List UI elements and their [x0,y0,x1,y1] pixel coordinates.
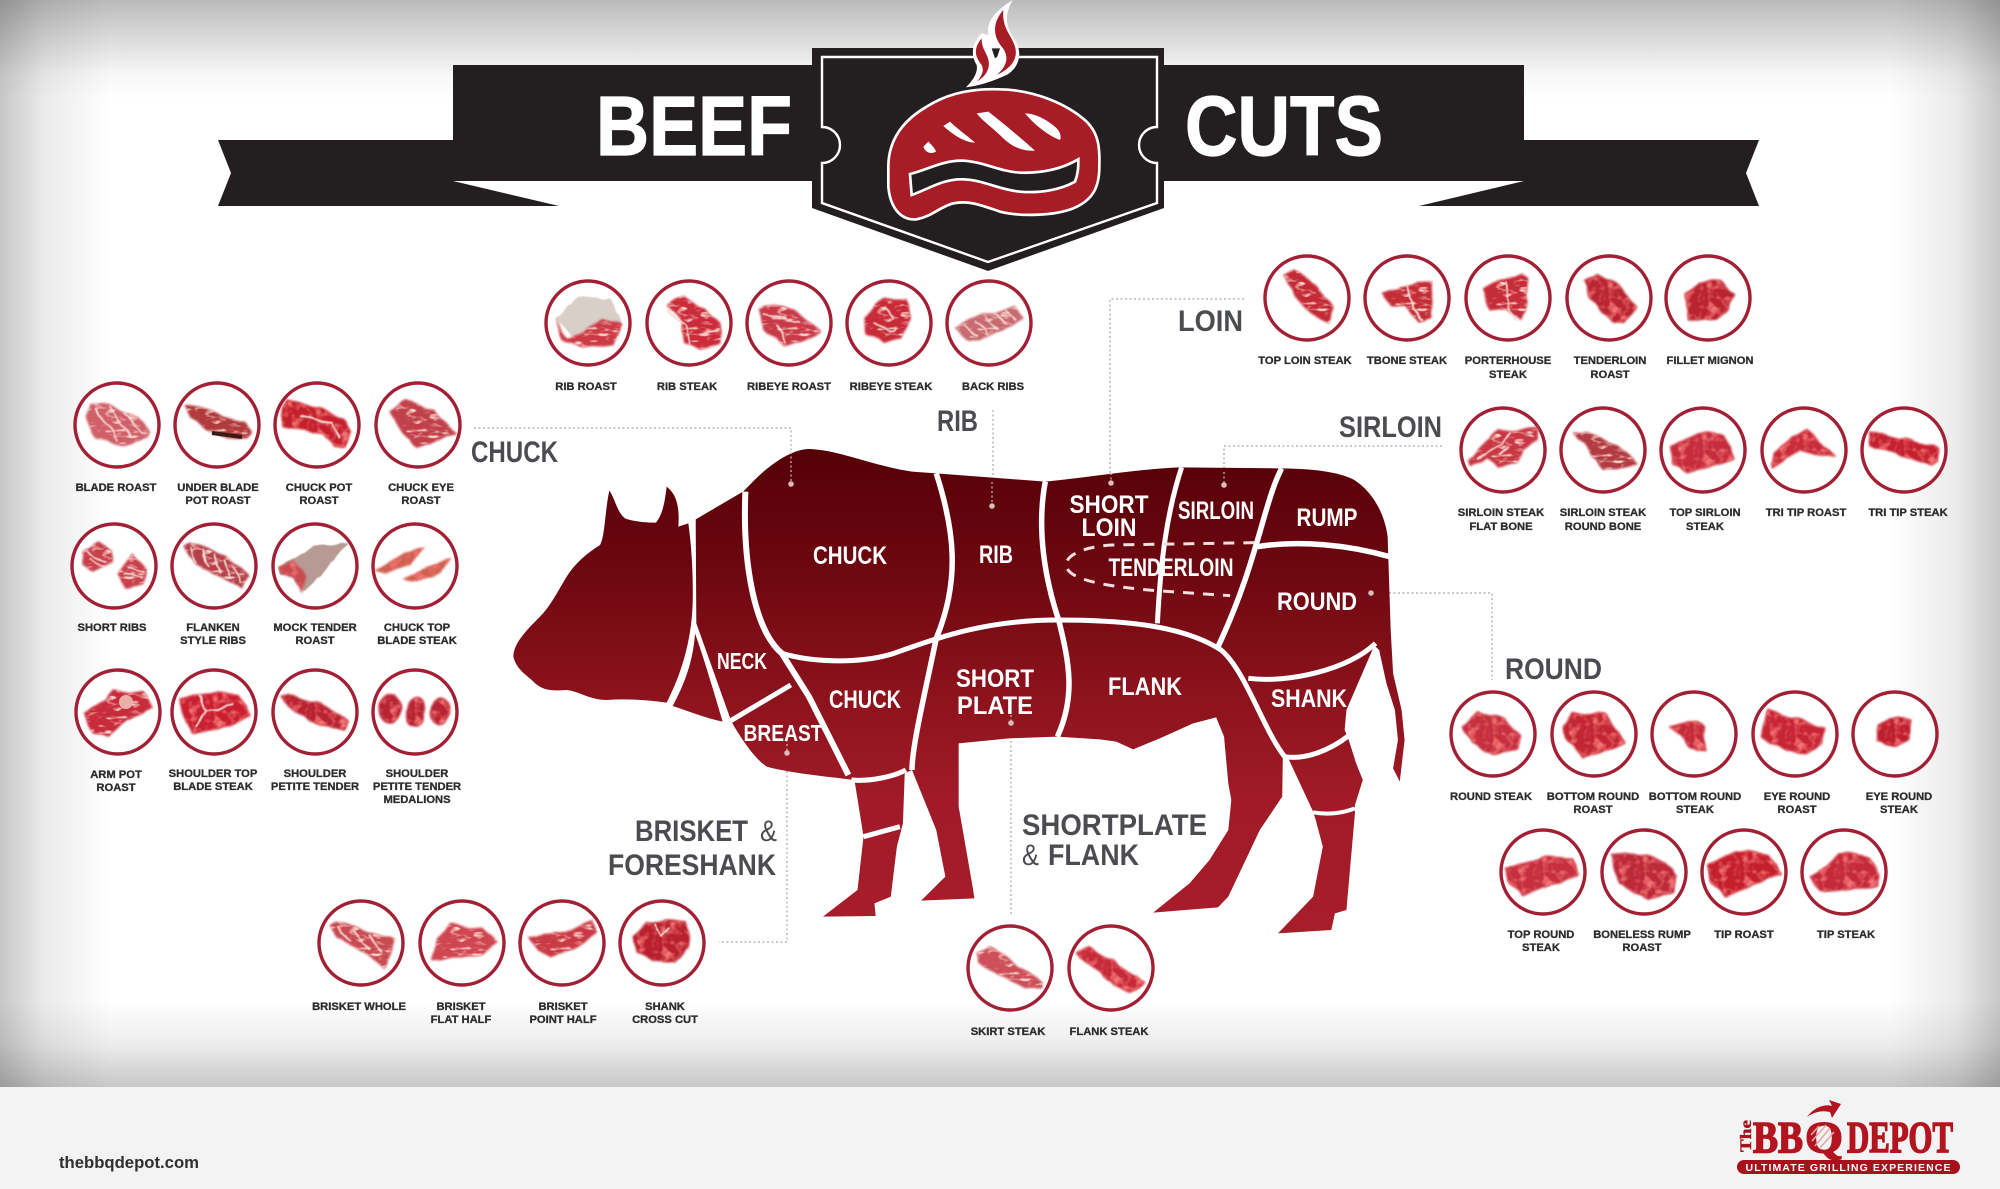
cow cut labels: PLATE [957,692,1033,720]
cut: boneless rump roast [1593,830,1691,954]
cut: brisket flat half [420,901,504,1026]
cut: arm pot roast: ARM POT [90,769,142,781]
panel: loin cuts [1258,256,1754,381]
cut: sirloin steak flat bone: FLAT BONE [1469,521,1533,533]
cut: chuck pot roast: ROAST [299,495,339,507]
cut: sirloin steak round bone: SIRLOIN STEAK [1560,507,1646,519]
icon: steak with smoke [888,0,1099,219]
cut: bottom round roast: BOTTOM ROUND [1547,791,1639,803]
cut: shoulder petite tender medalions: PETITE TENDER [373,781,461,793]
cow cut labels: SHORT [956,665,1034,693]
cut: tenderloin roast: TENDERLOIN [1574,355,1646,367]
title word cuts: CUTS [1185,79,1383,173]
cow cut labels: SIRLOIN [1178,497,1254,525]
cut: eye round roast: EYE ROUND [1764,791,1830,803]
cut: boneless rump roast: BONELESS RUMP [1593,929,1691,941]
logo wordmark: BB [1753,1113,1803,1162]
cut: shank cross cut [620,901,704,1026]
cut: short ribs [72,524,156,634]
cow cut labels: RIB [979,541,1013,569]
cut: tbone steak: TBONE STEAK [1367,355,1447,367]
cut: tip roast: TIP ROAST [1714,929,1774,941]
heading: shortplate and flank: FLANK [1048,839,1139,872]
cut: tenderloin roast: ROAST [1590,369,1630,381]
cut: tbone steak [1365,256,1449,367]
cut: ribeye steak [847,281,932,393]
leader lines [474,299,1492,942]
cut: bottom round steak [1649,692,1741,816]
cut: chuck top blade steak: CHUCK TOP [384,622,451,634]
cut: tri tip steak: TRI TIP STEAK [1868,507,1948,519]
cut: eye round steak: EYE ROUND [1866,791,1932,803]
cow cut labels: TENDERLOIN [1108,554,1234,582]
cut dividers [729,467,1389,837]
heading: brisket and foreshank: FORESHANK [608,849,776,882]
title word beef: BEEF [596,79,792,173]
cut: shoulder petite tender: PETITE TENDER [271,781,359,793]
cut: tip steak [1802,830,1886,941]
heading: chuck: CHUCK [471,436,558,469]
heading: sirloin: SIRLOIN [1339,411,1442,444]
cut: tenderloin roast [1567,256,1651,381]
cut: blade roast [75,383,159,494]
cut: brisket whole [312,901,406,1013]
cut: bottom round roast: ROAST [1573,804,1613,816]
cut: sirloin steak flat bone [1458,408,1545,533]
cut: eye round roast [1753,692,1837,816]
panel: short plate and flank cuts [968,926,1153,1038]
logo wordmark: DEPOT [1847,1113,1953,1162]
heading: rib: RIB [937,405,978,438]
logo tagline pill: ULTIMATE GRILLING EXPERIENCE [1746,1162,1950,1174]
cut: shoulder petite tender [271,670,359,793]
heading: brisket and foreshank: & [760,815,777,848]
heading: shortplate and flank [1022,809,1207,872]
cow cut labels: SHORT [1070,491,1148,519]
logo wordmark [1753,1113,1953,1162]
cut: rib roast: RIB ROAST [555,381,617,393]
cut: mock tender roast [273,524,357,647]
cut: top sirloin steak: TOP SIRLOIN [1669,507,1741,519]
panel: chuck cuts [72,383,461,806]
cow cut labels [717,491,1358,746]
cut: top sirloin steak [1661,408,1745,533]
logo flame [1807,1100,1841,1118]
cut: fillet mignon: FILLET MIGNON [1666,355,1754,367]
cut: flanken style ribs: FLANKEN [186,622,240,634]
heading: loin: LOIN [1178,305,1243,338]
cut: fillet mignon [1666,256,1754,367]
cut: porterhouse steak: STEAK [1489,369,1527,381]
cut: sirloin steak round bone: ROUND BONE [1565,521,1642,533]
cut: chuck pot roast [275,383,359,507]
cut: blade roast: BLADE ROAST [76,482,157,494]
cut: porterhouse steak: PORTERHOUSE [1465,355,1552,367]
cut: brisket point half: POINT HALF [529,1014,597,1026]
cut: shoulder top blade steak: BLADE STEAK [173,781,253,793]
cut: round steak: ROUND STEAK [1450,791,1532,803]
cut: shank cross cut: SHANK [645,1001,685,1013]
cut: chuck top blade steak [373,524,457,647]
logo wordmark: Q [1805,1113,1843,1162]
cut: under blade pot roast: POT ROAST [185,495,251,507]
cut: bottom round steak: STEAK [1676,804,1714,816]
cut: back ribs: BACK RIBS [962,381,1025,393]
cow cut labels: FLANK [1108,673,1182,701]
cut: ribeye steak: RIBEYE STEAK [850,381,932,393]
cut: shank cross cut: CROSS CUT [632,1014,698,1026]
cut: mock tender roast: MOCK TENDER [273,622,357,634]
cut: chuck eye roast [376,383,460,507]
cow cut labels: BREAST [744,720,822,746]
cow cut labels: NECK [717,648,767,674]
cut: brisket whole: BRISKET WHOLE [312,1001,406,1013]
cut: arm pot roast [76,670,160,794]
cut: brisket point half: BRISKET [538,1001,588,1013]
cut: shoulder top blade steak [169,670,258,793]
heading: shortplate and flank: & [1022,839,1039,872]
cut: shoulder top blade steak: SHOULDER TOP [169,768,258,780]
cut: shoulder petite tender medalions: SHOULDER [386,768,448,780]
cut: short ribs: SHORT RIBS [78,622,147,634]
logo grill mark [1811,1125,1834,1148]
cut: chuck pot roast: CHUCK POT [286,482,352,494]
panel: sirloin cuts [1458,408,1948,533]
heading: round: ROUND [1505,653,1602,686]
cut: eye round roast: ROAST [1777,804,1817,816]
cut: skirt steak: SKIRT STEAK [971,1026,1045,1038]
cut: flank steak [1069,926,1153,1038]
cut: back ribs [947,281,1031,393]
leader dots on cow [784,452,1374,756]
cut: round steak [1450,692,1535,803]
cut: top loin steak [1258,256,1352,367]
cut: top loin steak: TOP LOIN STEAK [1258,355,1352,367]
panel: round cuts [1450,692,1937,954]
cut: tri tip roast: TRI TIP ROAST [1766,507,1846,519]
cut: top round steak: STEAK [1522,942,1560,954]
cut: eye round steak [1853,692,1937,816]
cut: ribeye roast: RIBEYE ROAST [747,381,831,393]
panel: brisket and foreshank cuts [312,901,704,1026]
cow cut labels: CHUCK [813,542,887,570]
cut: brisket flat half: BRISKET [436,1001,486,1013]
heading: shortplate and flank: SHORTPLATE [1022,809,1207,842]
cow cut labels: CHUCK [829,686,901,714]
cut: chuck eye roast: CHUCK EYE [388,482,454,494]
cut: bottom round roast [1547,692,1639,816]
cut: top round steak: TOP ROUND [1508,929,1574,941]
cut: skirt steak [968,926,1052,1038]
cut: flank steak: FLANK STEAK [1070,1026,1148,1038]
cut: top sirloin steak: STEAK [1686,521,1724,533]
cow lower neck piece [673,633,723,722]
heading: brisket and foreshank [608,815,777,882]
cut: rib steak: RIB STEAK [657,381,717,393]
cut: flanken style ribs: STYLE RIBS [180,635,246,647]
cut: chuck eye roast: ROAST [401,495,441,507]
cow cut labels: LOIN [1082,514,1136,542]
cut: brisket point half [520,901,604,1026]
cut: tip roast [1702,830,1786,941]
cut: under blade pot roast: UNDER BLADE [177,482,259,494]
cow cut labels: RUMP [1296,504,1358,532]
cow diagram [513,449,1405,933]
logo the: The [1738,1120,1755,1152]
cut: sirloin steak round bone [1560,408,1646,533]
cut: shoulder petite tender: SHOULDER [284,768,346,780]
cow cut labels: SHANK [1271,685,1347,713]
cut: tri tip roast [1762,408,1846,519]
cut: flanken style ribs [172,524,256,647]
cut: ribeye roast [747,281,831,393]
cut: eye round steak: STEAK [1880,804,1918,816]
cut: boneless rump roast: ROAST [1622,942,1662,954]
cut: shoulder petite tender medalions: MEDALIONS [383,794,451,806]
cut: mock tender roast: ROAST [295,635,335,647]
cut: bottom round steak: BOTTOM ROUND [1649,791,1741,803]
cut: arm pot roast: ROAST [96,782,136,794]
heading: brisket and foreshank: BRISKET [635,815,748,848]
cow body silhouette [696,449,1405,933]
cut: top round steak [1501,830,1585,954]
cut: brisket flat half: FLAT HALF [431,1014,492,1026]
footer url: thebbqdepot.com [59,1153,199,1172]
cut: tip steak: TIP STEAK [1817,929,1875,941]
panel: rib cuts [546,281,1031,393]
cut: shoulder petite tender medalions [373,670,461,806]
cut: porterhouse steak [1465,256,1552,381]
cow head [513,487,693,703]
logo: the bbq depot [1737,1100,1960,1174]
header banner [218,0,1759,271]
cut: chuck top blade steak: BLADE STEAK [377,635,457,647]
cow cut labels: ROUND [1277,588,1357,616]
cut: rib roast [546,281,630,393]
cut: rib steak [647,281,731,393]
cut: under blade pot roast [175,383,259,507]
cut: sirloin steak flat bone: SIRLOIN STEAK [1458,507,1544,519]
cut: tri tip steak [1862,408,1948,519]
